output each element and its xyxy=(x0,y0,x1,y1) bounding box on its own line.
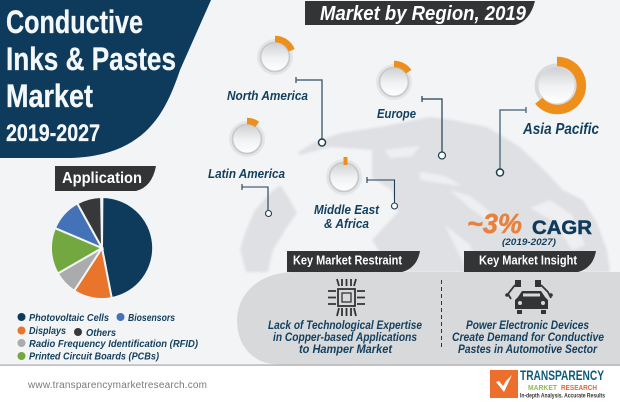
website url: www.transparencymarketresearch.com xyxy=(27,380,207,391)
logo: Transparency Market Research: RESEARCH xyxy=(561,383,597,392)
legend: application: Radio Frequency Identification (RFID) xyxy=(29,338,198,350)
donut: Middle East and Africa xyxy=(326,157,362,195)
pie chart: application xyxy=(51,197,153,299)
leader line: Asia Pacific xyxy=(496,107,526,176)
title text: Inks & Pastes xyxy=(6,41,176,77)
region labels: Middle East xyxy=(314,202,380,217)
legend: application: Others xyxy=(86,327,116,339)
logo: Transparency Market Research: MARKET xyxy=(528,383,557,392)
heading: Application: Application xyxy=(62,170,142,187)
CAGR callout xyxy=(467,208,592,247)
text: restraint: in Copper-based Applications xyxy=(273,330,417,344)
legend: application: Photovoltaic Cells xyxy=(29,312,109,324)
CAGR callout: CAGR xyxy=(532,217,592,239)
icon: car with robot arms xyxy=(505,280,553,314)
legend: application: Biosensors xyxy=(128,312,175,324)
text: restraint xyxy=(268,318,422,356)
donut: Asia Pacific xyxy=(534,61,581,109)
text: insight: Power Electronic Devices xyxy=(466,318,589,332)
world map background xyxy=(240,117,610,272)
region labels: North America xyxy=(227,88,308,103)
legend: application: Printed Circuit Boards (PCBs) xyxy=(29,350,159,362)
heading: Application xyxy=(55,166,156,191)
text: restraint: Lack of Technological Expertise xyxy=(268,318,422,332)
heading: Market by Region: Market by Region, 2019 xyxy=(320,3,527,25)
panel: key market band xyxy=(237,272,620,364)
heading: Key Market Insight: Key Market Insight xyxy=(479,254,578,268)
logo: Transparency Market Research: In-depth Analysis. Accurate Results xyxy=(520,394,606,400)
leader line: Europe xyxy=(422,96,446,159)
title text: 2019-2027 xyxy=(6,120,100,147)
region labels: Latin America xyxy=(208,166,285,181)
donut: North America xyxy=(257,39,293,75)
title text xyxy=(6,4,176,147)
donut: Latin America xyxy=(229,121,265,157)
region labels: Asia Pacific xyxy=(522,121,599,138)
leader line: North America xyxy=(296,77,326,146)
text: restraint: to Hamper Market xyxy=(299,342,393,356)
heading: Key Market Restraint: Key Market Restraint xyxy=(293,254,403,268)
text: insight xyxy=(452,318,604,356)
text: insight: Pastes in Automotive Sector xyxy=(458,342,598,356)
leader line: Middle East and Africa xyxy=(367,177,398,209)
icon: microchip xyxy=(328,279,365,316)
title banner xyxy=(0,0,211,158)
CAGR callout: (2019-2027) xyxy=(502,237,556,247)
divider xyxy=(440,280,442,350)
CAGR callout: ~3% xyxy=(467,208,522,239)
heading: Key Market Insight xyxy=(464,251,596,272)
title text: Conductive xyxy=(6,4,143,40)
logo: Transparency Market Research xyxy=(490,367,606,400)
region labels: & Africa xyxy=(324,216,369,231)
legend: application xyxy=(18,312,198,362)
region labels xyxy=(208,88,599,231)
title text: Market xyxy=(6,78,93,114)
region labels: Europe xyxy=(377,106,416,121)
legend: application: Displays xyxy=(29,325,66,337)
donut: Europe xyxy=(376,64,412,100)
leader line: Latin America xyxy=(242,184,272,216)
heading: Key Market Restraint xyxy=(287,251,420,272)
